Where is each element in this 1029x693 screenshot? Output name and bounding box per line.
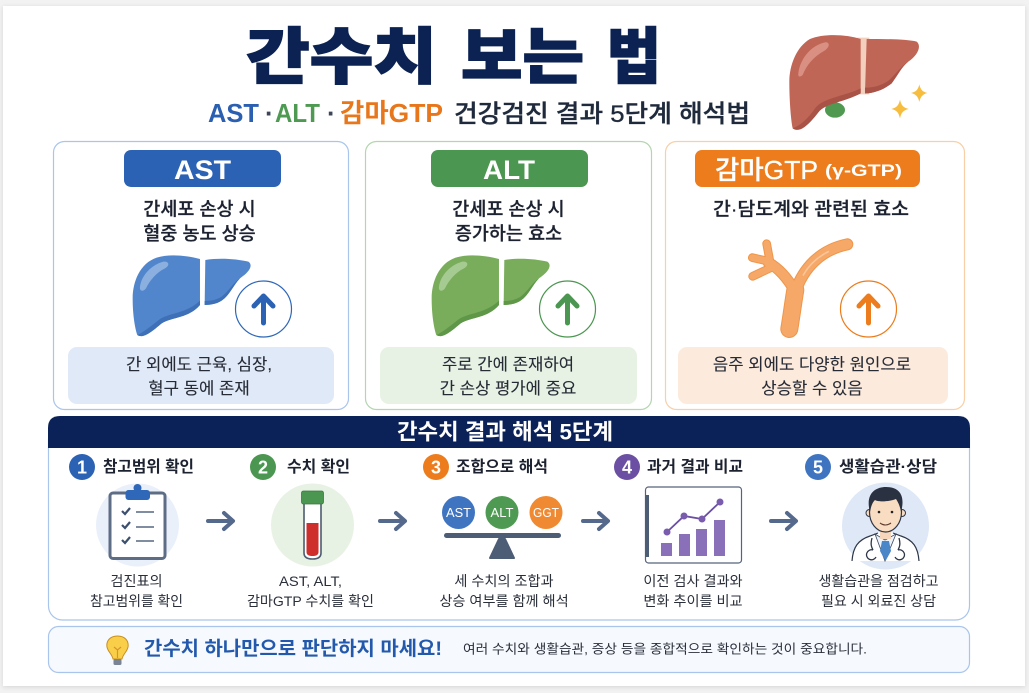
step 2 heading: 수치 확인 [287,458,350,476]
icon: up arrow [540,281,596,337]
icon: up arrow [840,281,896,337]
title: 간수치 [246,23,437,91]
GGT badge: (γ-GTP) [825,161,902,180]
step 4 heading [614,454,743,480]
steps header [48,416,970,448]
step 3 text: 세 수치의 조합과 [454,574,554,590]
step 4 text: 이전 검사 결과와 [643,574,743,590]
callout text: 여러 수치와 생활습관, 증상 등을 종합적으로 확인하는 것이 중요합니다. [463,642,867,656]
step 5 heading: 생활습관·상담 [839,458,937,476]
icon: liver illustration with sparkles [789,35,927,130]
icon: test tube [271,484,354,566]
GGT description: 간·담도계와 관련된 효소 [713,198,909,220]
step 5 text [818,574,938,610]
AST note: 간 외에도 근육, 심장, [126,355,272,374]
AST description [143,198,256,244]
step 3 heading: 조합으로 해석 [456,458,548,476]
step 1 heading [69,454,194,480]
title: 보는 [461,23,584,91]
arrow [380,513,405,529]
AST badge [124,150,281,187]
icon: light bulb [107,636,128,665]
step 2 heading: 2 [258,458,268,478]
steps header: 간수치 결과 해석 5단계 [397,420,613,444]
GGT badge: 감마GTP [715,155,818,185]
step 3 heading [423,454,548,480]
subtitle: · [265,98,274,128]
arrow [583,513,608,529]
step 5 text: 필요 시 외료진 상담 [821,594,936,610]
icon: up arrow [236,281,292,337]
ALT note: 주로 간에 존재하여 [442,355,574,374]
ALT note [380,347,637,404]
step 1 heading: 참고범위 확인 [103,458,194,476]
AST note [68,347,334,404]
step 4 text: 변화 추이를 비교 [643,594,743,610]
step 3 text [439,574,569,610]
subtitle [208,98,750,128]
step 2 text: 감마GTP 수치를 확인 [247,594,374,610]
ALT badge: ALT [483,155,536,185]
icon: balance scale: ALT [490,506,514,520]
step 4 text [643,574,743,610]
ALT badge [431,150,588,187]
callout heading: 간수치 하나만으로 판단하지 마세요! [144,638,442,660]
step 5 heading: 5 [813,458,823,478]
GGT note: 음주 외에도 다양한 원인으로 [713,355,911,374]
subtitle: ALT [275,98,320,128]
icon: balance scale: GGT [533,506,559,520]
GGT note [678,347,948,404]
step 2 heading [250,454,350,480]
step 4 heading: 과거 결과 비교 [647,458,743,476]
icon: green liver [432,255,550,336]
subtitle: AST [208,98,259,128]
step 1 text: 검진표의 [110,574,163,590]
title [246,23,661,91]
panel: ALT [366,142,652,410]
step 4 heading: 4 [622,458,632,478]
step 2 text: AST, ALT, [279,574,342,590]
subtitle: 감마GTP [340,98,443,128]
icon: doctor [842,482,929,570]
arrow [208,513,233,529]
subtitle: · [327,98,336,128]
step 3 text: 상승 여부를 함께 해석 [439,594,569,610]
step 5 text: 생활습관을 점검하고 [818,574,938,590]
GGT note: 상승할 수 있음 [761,379,863,398]
AST description: 간세포 손상 시 [143,198,256,220]
arrow [771,513,796,529]
step 2 text [247,574,374,610]
ALT description: 간세포 손상 시 [452,198,565,220]
icon: balance scale [442,496,562,558]
callout [48,626,970,672]
GGT badge [695,150,920,187]
icon: bile duct [752,244,847,329]
panel: 5 steps [48,416,970,620]
icon: blue liver [133,255,251,336]
step 1 text [90,574,183,610]
AST badge: AST [174,155,232,185]
panel: AST [54,142,348,410]
step 1 heading: 1 [77,458,87,478]
ALT note: 간 손상 평가에 중요 [440,379,576,398]
ALT description [452,198,565,244]
icon: balance scale: AST [446,506,471,520]
subtitle: 건강검진 결과 5단계 해석법 [454,100,750,128]
step 3 heading: 3 [431,458,441,478]
AST description: 혈중 농도 상승 [143,223,256,244]
ALT description: 증가하는 효소 [455,223,562,244]
title: 법 [607,23,661,91]
step 5 heading [805,454,937,480]
step 1 text: 참고범위를 확인 [90,594,183,610]
AST note: 혈구 동에 존재 [148,379,250,398]
icon: clipboard [96,484,179,566]
icon: trend chart [645,487,742,563]
panel: GGT [666,142,964,410]
